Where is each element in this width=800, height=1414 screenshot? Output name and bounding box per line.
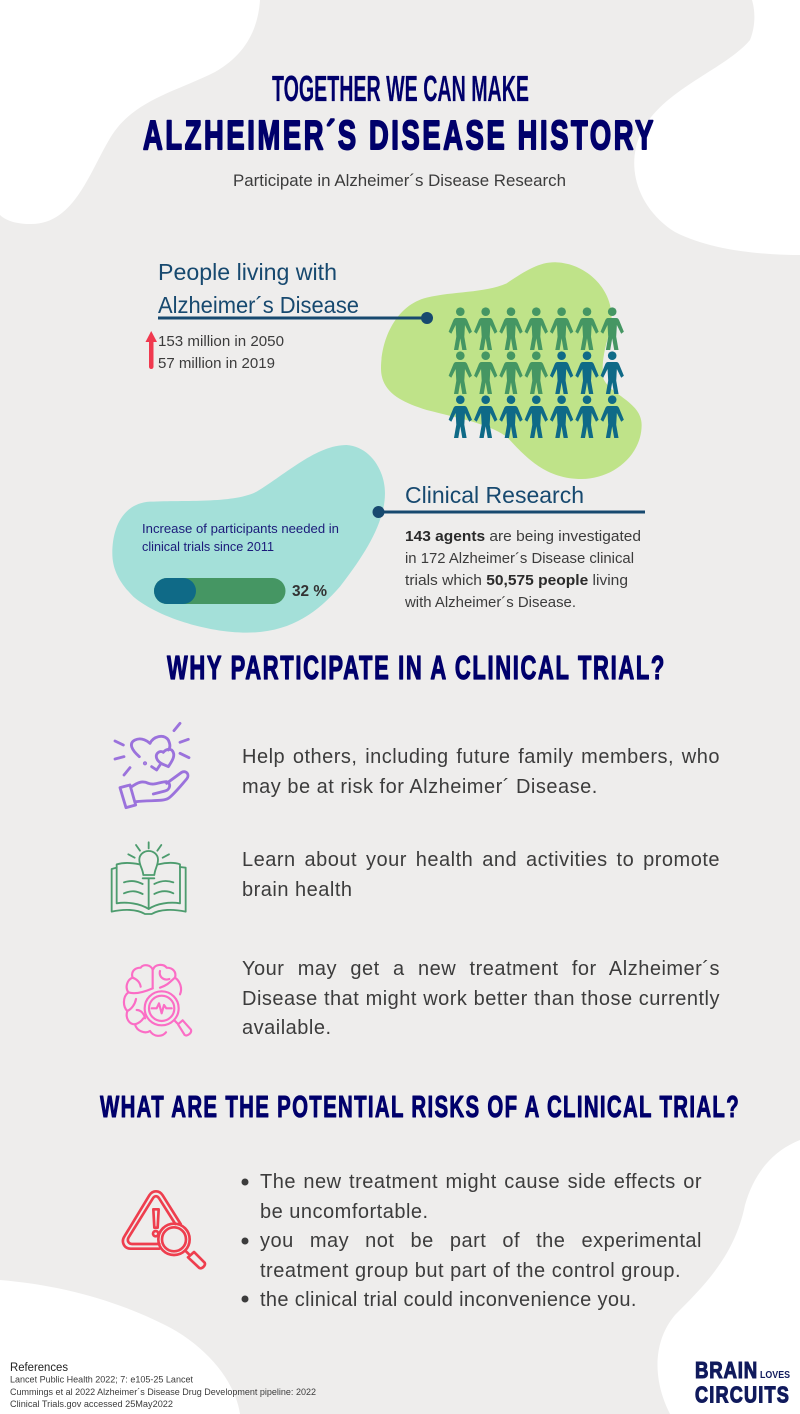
- references: Clinical Trials.gov accessed 25May2022: [10, 1399, 173, 1409]
- title: TOGETHER WE CAN MAKE: [272, 68, 529, 109]
- clinical research text: in 172 Alzheimer´s Disease clinical: [405, 550, 634, 567]
- heading: people living with Alzheimer's: [158, 259, 359, 318]
- icon: warning triangle with magnifier: [123, 1191, 205, 1268]
- aqua blob: [112, 445, 385, 633]
- reason text: learn about health: Learn about your health and activities to promote: [242, 849, 720, 871]
- heading: clinical research: Clinical Research: [405, 482, 584, 508]
- participants text: [142, 521, 339, 554]
- participants text: clinical trials since 2011: [142, 539, 274, 554]
- icon: hand with hearts: [115, 723, 189, 808]
- progress bar: 32 %: 32 %: [292, 583, 327, 600]
- participants text: Increase of participants needed in: [142, 521, 339, 536]
- progress bar: 32 %: [154, 578, 327, 604]
- clinical research text: [404, 528, 641, 611]
- heading: people living with Alzheimer's: Alzheimer´s Disease: [158, 292, 359, 318]
- reason text: new treatment: Your may get a new treatment for Alzheimer´s: [242, 958, 720, 980]
- clinical research text: with Alzheimer´s Disease.: [404, 594, 576, 611]
- risk text list: the clinical trial could inconvenience you.: [260, 1289, 637, 1311]
- green blob: [381, 262, 642, 479]
- reason text: help others: Help others, including future family members, who: [242, 746, 720, 768]
- icon: book with light bulb: [112, 842, 186, 914]
- connector line: clinical research: [372, 506, 645, 518]
- clinical research text: trials which 50,575 people living: [405, 572, 628, 589]
- risk text list: you may not be part of the experimental: [260, 1230, 702, 1252]
- risk text list: be uncomfortable.: [260, 1200, 429, 1222]
- reason text: new treatment: [242, 958, 720, 1039]
- pictogram: people: [449, 307, 624, 438]
- risk bullets: [242, 1178, 248, 1302]
- reason text: learn about health: [242, 849, 720, 900]
- clinical research text: 143 agents are being investigated: [405, 528, 641, 545]
- subtitle: Participate in Alzheimer´s Disease Research: [233, 171, 566, 190]
- risk text list: [260, 1171, 702, 1311]
- references: [10, 1362, 316, 1409]
- reason text: help others: may be at risk for Alzheimer´ Disease.: [242, 776, 598, 798]
- logo: Brain Loves Circuits: BRAIN: [695, 1357, 758, 1383]
- prevalence figures: 153 million in 2050: [158, 333, 284, 350]
- risk text list: treatment group but part of the control group.: [260, 1260, 681, 1282]
- references: Cummings et al 2022 Alzheimer´s Disease Drug Development pipeline: 2022: [10, 1387, 316, 1397]
- prevalence figures: [158, 333, 284, 372]
- logo: Brain Loves Circuits: LOVES: [760, 1370, 790, 1381]
- references: Lancet Public Health 2022; 7: e105-25 Lancet: [10, 1374, 193, 1384]
- reason text: learn about health: brain health: [242, 878, 353, 900]
- connector line: people: [158, 312, 433, 324]
- references: References: [10, 1362, 68, 1374]
- heading: people living with Alzheimer's: People living with: [158, 259, 337, 285]
- risk text list: The new treatment might cause side effects or: [260, 1171, 702, 1193]
- prevalence figures: 57 million in 2019: [158, 355, 275, 372]
- title: [143, 68, 656, 158]
- reason text: new treatment: Disease that might work better than those currently: [242, 988, 720, 1010]
- logo: Brain Loves Circuits: [695, 1357, 790, 1408]
- reason text: help others: [242, 746, 720, 798]
- icon: brain with magnifier: [124, 965, 191, 1036]
- icon: red up arrow: [146, 331, 157, 369]
- reason text: new treatment: available.: [242, 1017, 332, 1039]
